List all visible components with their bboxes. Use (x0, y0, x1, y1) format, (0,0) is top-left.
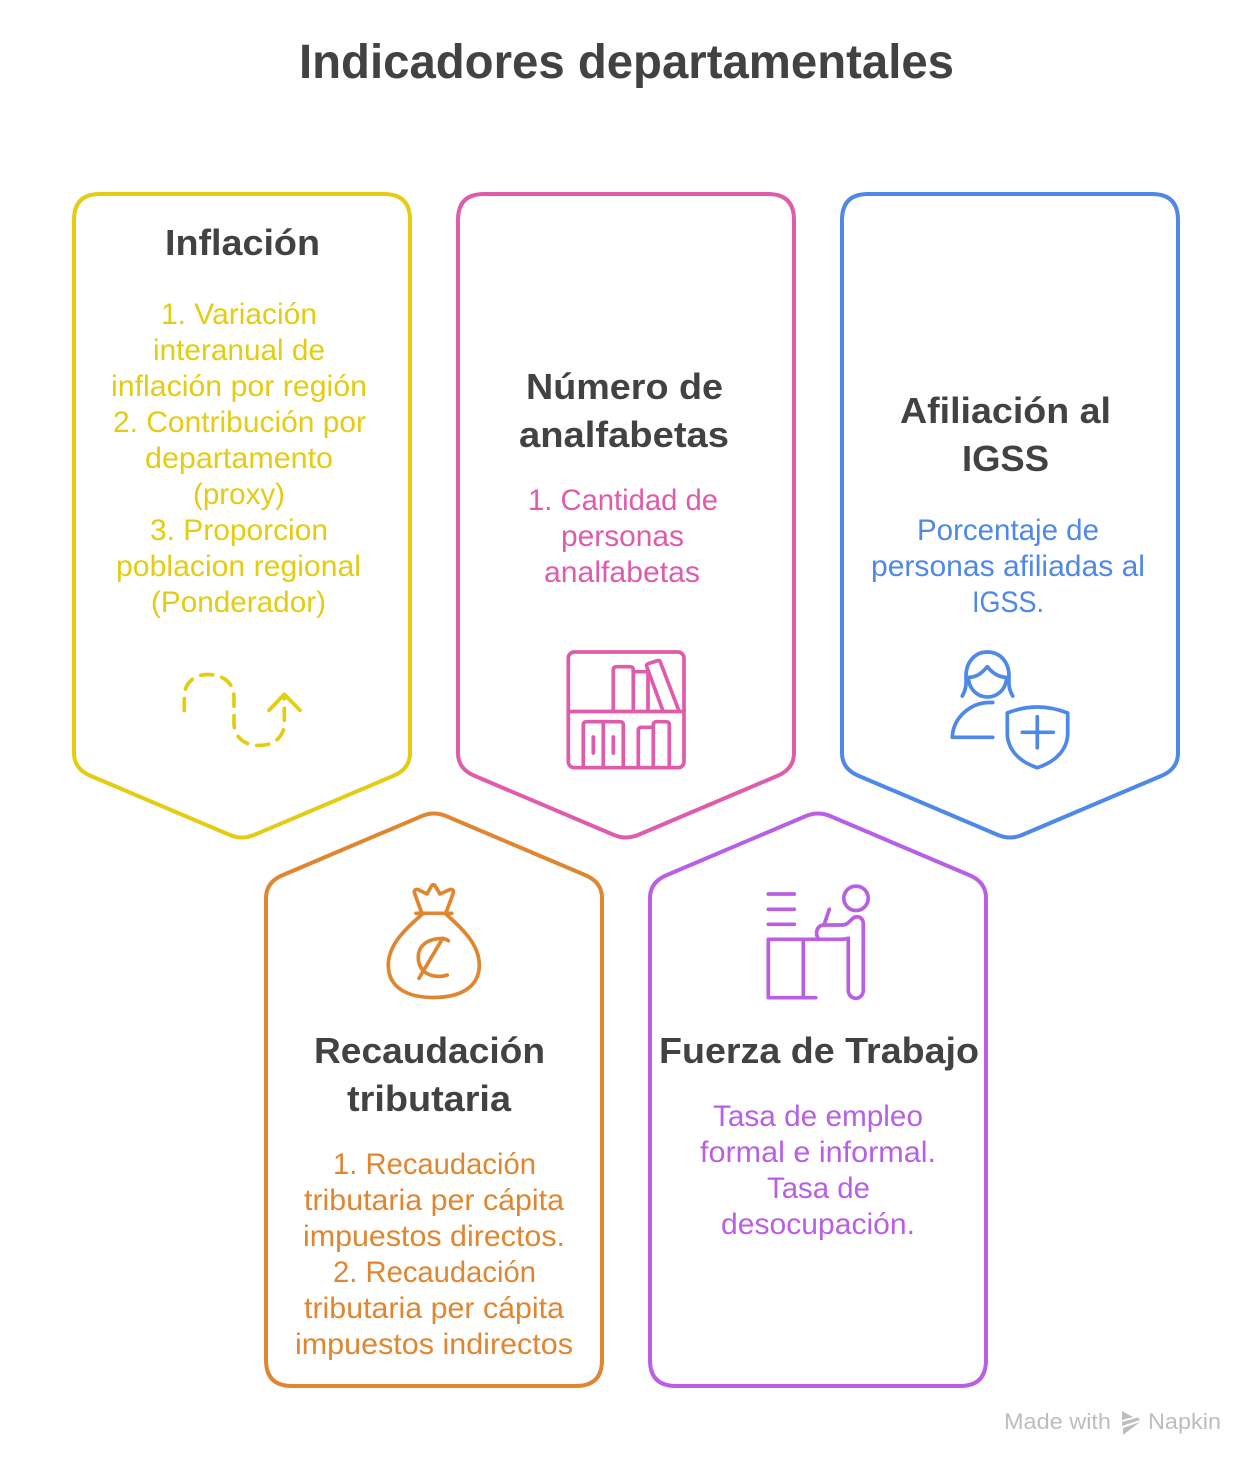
heading: Afiliación al IGSS: Afiliación al (900, 390, 1111, 431)
panel outline: Afiliación al IGSS (842, 194, 1178, 838)
text block: Inflación indicators: poblacion regional (116, 550, 361, 583)
text block: Número de analfabetas description: personas (561, 520, 684, 553)
text block: Inflación indicators (111, 298, 367, 619)
text block: Número de analfabetas description: 1. Cantidad de (528, 484, 718, 517)
panel: Número de analfabetas (458, 194, 794, 838)
text block: Recaudación tributaria indicators: impuestos indirectos (295, 1328, 573, 1361)
text block: Recaudación tributaria indicators: tributaria per cápita (304, 1292, 564, 1325)
panel: Inflación (74, 194, 410, 838)
watermark: Made with Napkin: Napkin (1148, 1409, 1221, 1434)
text block: Recaudación tributaria indicators: tributaria per cápita (304, 1184, 564, 1217)
heading: Recaudación tributaria: Recaudación (314, 1030, 545, 1071)
text block: Inflación indicators: (Ponderador) (151, 586, 326, 619)
text block: Número de analfabetas description (528, 484, 718, 589)
text block: Inflación indicators: (proxy) (193, 478, 285, 511)
title: Indicadores departamentales (299, 36, 954, 89)
text block: Recaudación tributaria indicators: impuestos directos. (303, 1220, 565, 1253)
text block: Recaudación tributaria indicators (295, 1148, 573, 1361)
heading: Número de analfabetas: analfabetas (519, 414, 729, 455)
icon: person working at desk (768, 886, 868, 998)
text block: Inflación indicators: 3. Proporcion (150, 514, 328, 547)
text block: Afiliación al IGSS description: IGSS. (972, 586, 1044, 619)
heading: Inflación: Inflación (165, 222, 320, 263)
text block: Inflación indicators: interanual de (153, 334, 325, 367)
watermark: Made with Napkin (1004, 1409, 1221, 1435)
heading: Afiliación al IGSS: IGSS (962, 438, 1049, 479)
heading: Recaudación tributaria: tributaria (347, 1078, 512, 1119)
heading: Fuerza de Trabajo: Fuerza de Trabajo (659, 1030, 979, 1071)
icon: dashed wavy arrow (184, 674, 300, 746)
text block: Fuerza de Trabajo description: Tasa de empleo (713, 1100, 923, 1133)
text block: Número de analfabetas description: analfabetas (544, 556, 700, 589)
text block: Afiliación al IGSS description: personas afiliadas al (871, 550, 1145, 583)
text block: Fuerza de Trabajo description: Tasa de (767, 1172, 870, 1205)
text block: Afiliación al IGSS description (871, 514, 1145, 619)
heading: Recaudación tributaria (314, 1030, 545, 1119)
icon: person with health shield (952, 652, 1068, 768)
panel: Fuerza de Trabajo (650, 814, 986, 1386)
watermark: Made with Napkin: Made with (1004, 1409, 1111, 1434)
panel: Afiliación al IGSS (842, 194, 1178, 838)
text block: Recaudación tributaria indicators: 2. Recaudación (333, 1256, 536, 1289)
text block: Afiliación al IGSS description: Porcentaje de (917, 514, 1099, 547)
text block: Fuerza de Trabajo description: desocupación. (721, 1208, 915, 1241)
text block: Inflación indicators: 1. Variación (161, 298, 317, 331)
text block: Inflación indicators: departamento (145, 442, 333, 475)
text block: Recaudación tributaria indicators: 1. Recaudación (333, 1148, 536, 1181)
heading: Número de analfabetas (519, 366, 729, 455)
panel outline: Número de analfabetas (458, 194, 794, 838)
panel outline: Fuerza de Trabajo (650, 814, 986, 1386)
panel outline: Inflación (74, 194, 410, 838)
text block: Inflación indicators: inflación por región (111, 370, 367, 403)
text block: Inflación indicators: 2. Contribución por (113, 406, 366, 439)
heading: Número de analfabetas: Número de (526, 366, 723, 407)
panel outline: Recaudación tributaria (266, 814, 602, 1386)
icon: Napkin logo (1122, 1411, 1140, 1435)
heading: Afiliación al IGSS (900, 390, 1111, 479)
text block: Fuerza de Trabajo description (700, 1100, 936, 1241)
panel: Recaudación tributaria (266, 814, 602, 1386)
icon: money bag with colón sign (388, 885, 479, 998)
text block: Fuerza de Trabajo description: formal e informal. (700, 1136, 936, 1169)
icon: bookshelf (568, 652, 684, 768)
